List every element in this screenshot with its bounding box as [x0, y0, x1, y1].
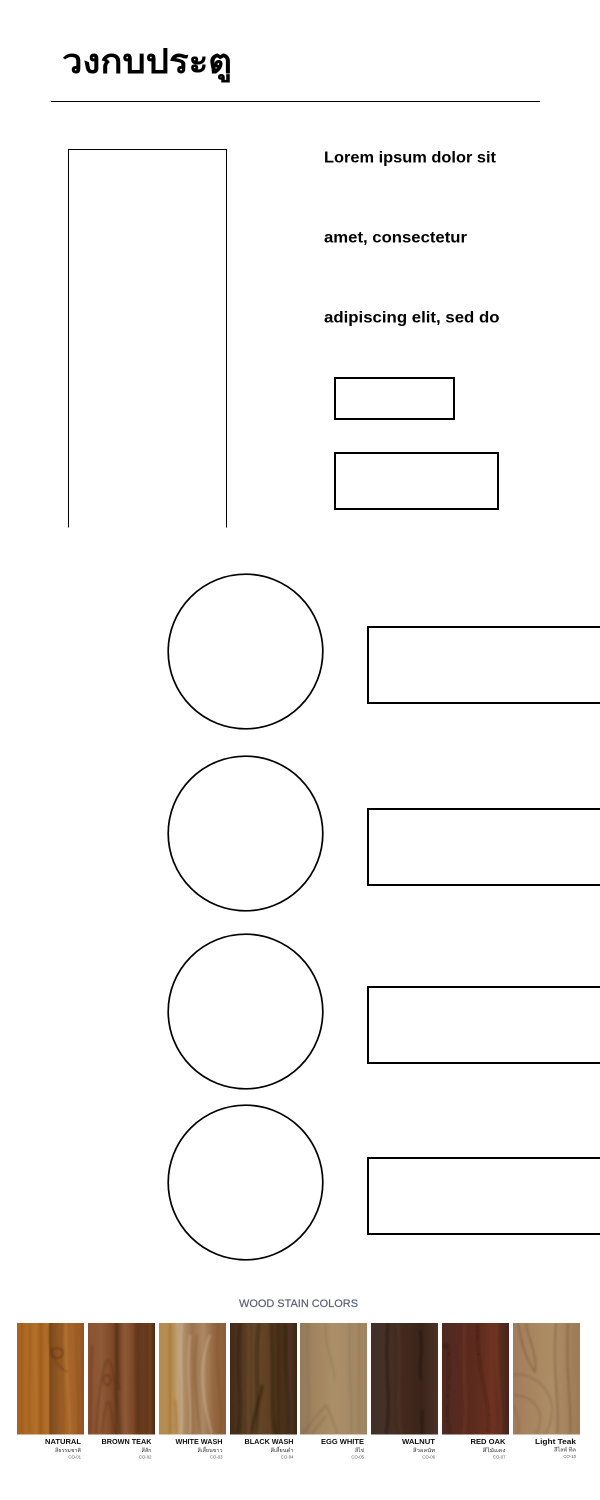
caption: black wash: BLACK WASH [244, 1439, 294, 1446]
swatch: light teak [513, 1323, 580, 1434]
caption: egg white: CO-05 [351, 1454, 365, 1460]
text block: description: Lorem ipsum dolor sit [324, 150, 496, 166]
caption: walnut [402, 1439, 436, 1460]
row 2 circle [168, 756, 323, 911]
caption: walnut: WALNUT [402, 1439, 436, 1446]
caption: egg white [321, 1439, 365, 1460]
swatch: brown teak [88, 1323, 155, 1434]
door frame outline [68, 150, 226, 528]
caption: red oak [470, 1439, 506, 1460]
empty box: large [335, 453, 498, 509]
caption: walnut: สีวอลนัท [413, 1447, 436, 1454]
swatch: red oak [442, 1323, 509, 1434]
caption: light teak [535, 1439, 577, 1459]
text block: description: adipiscing elit, sed do [324, 310, 500, 326]
caption: natural: CO-01 [68, 1454, 82, 1460]
row 1 circle [168, 574, 323, 729]
caption: red oak: RED OAK [470, 1439, 506, 1446]
caption: brown teak [102, 1439, 152, 1460]
title: วงกบประตู [62, 43, 232, 83]
caption: red oak: สีไม้แดง [482, 1446, 506, 1454]
row 3 box [368, 987, 600, 1063]
caption: black wash: CO-04 [281, 1454, 294, 1460]
empty box: small [335, 378, 454, 419]
caption: black wash: สีเสี้ยนดำ [270, 1446, 294, 1454]
caption: white wash: CO-03 [210, 1454, 223, 1460]
caption: walnut: CO-06 [422, 1454, 436, 1460]
row 3 circle [168, 934, 323, 1089]
caption: light teak: CO-10 [563, 1454, 577, 1459]
caption: natural: สีธรรมชาติ [55, 1447, 81, 1454]
heading: wood stain colors: WOOD STAIN COLORS [239, 1298, 358, 1310]
caption: brown teak: CO-02 [139, 1454, 152, 1460]
caption: light teak: Light Teak [535, 1439, 576, 1446]
caption: white wash [176, 1439, 223, 1460]
caption: brown teak: สีสัก [142, 1447, 152, 1454]
swatch: walnut [371, 1323, 438, 1434]
swatch: black wash [230, 1323, 297, 1434]
text block: description [324, 150, 500, 326]
swatch: natural [17, 1323, 84, 1434]
caption: red oak: CO-07 [493, 1454, 506, 1460]
caption: natural: NATURAL [45, 1439, 82, 1446]
panel: wood stain colors [17, 1298, 580, 1460]
caption: brown teak: BROWN TEAK [102, 1439, 152, 1446]
caption: white wash: WHITE WASH [176, 1439, 222, 1446]
header rule [51, 101, 540, 102]
swatch: egg white [300, 1323, 367, 1434]
swatch: white wash [159, 1323, 226, 1434]
caption: natural [45, 1439, 82, 1460]
row 4 box [368, 1158, 600, 1234]
caption: white wash: สีเสี้ยนขาว [198, 1446, 223, 1454]
row 2 box [368, 809, 600, 885]
row 1 box [368, 627, 600, 703]
caption: egg white: สีไข่ [355, 1446, 364, 1454]
caption: egg white: EGG WHITE [321, 1439, 364, 1446]
caption: light teak: สีไลท์ ทีค [554, 1446, 577, 1454]
swatch captions [45, 1439, 577, 1460]
caption: black wash [244, 1439, 294, 1460]
text block: description: amet, consectetur [324, 230, 467, 246]
row 4 circle [168, 1105, 323, 1260]
